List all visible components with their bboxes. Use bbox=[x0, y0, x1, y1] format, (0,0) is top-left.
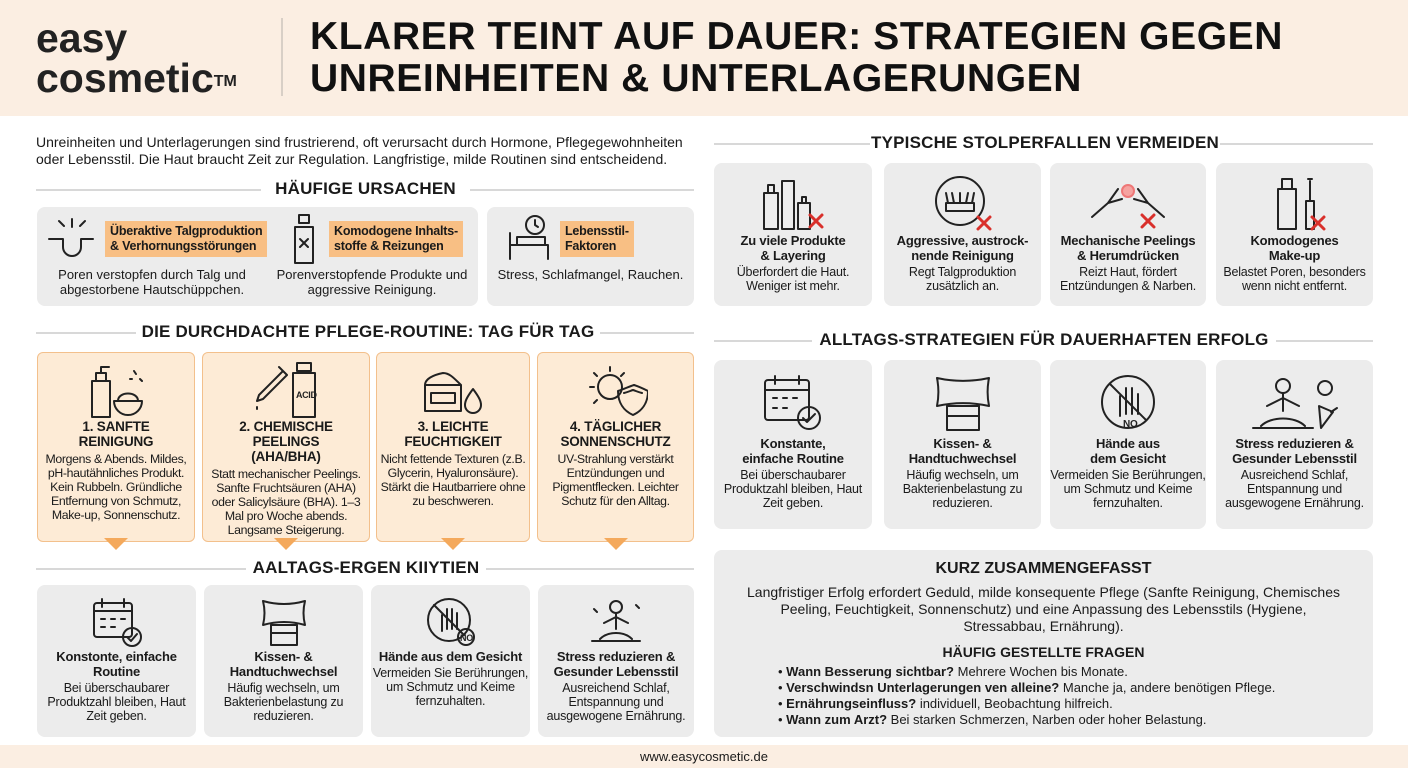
footer bbox=[0, 745, 1408, 768]
card: hands: Vermeiden Sie Berührungen, um Schmutz und Keime fernzuhalten. bbox=[373, 666, 528, 708]
card: aggressive cleansing: Aggressive, austrock- bbox=[897, 233, 1028, 248]
footer: www.easycosmetic.de bbox=[640, 749, 768, 764]
logo bbox=[36, 15, 237, 101]
card: stress: Ausreichend Schlaf, Entspannung und ausgewogene Ernährung. bbox=[547, 681, 685, 723]
card: aggressive cleansing bbox=[884, 163, 1041, 306]
card: picking: & Herumdrücken bbox=[1077, 248, 1179, 263]
heading: daily: AALTAGS-ERGEN KIIYTIEN bbox=[253, 558, 479, 577]
card: hands right bbox=[1050, 360, 1206, 529]
card: cleansing: 1. SANFTE bbox=[82, 419, 150, 434]
title bbox=[310, 15, 1283, 100]
tag: comedogenic: stoffe & Reizungen bbox=[334, 239, 444, 253]
tag: comedogenic bbox=[329, 221, 463, 257]
intro text: Unreinheiten und Unterlagerungen sind frustrierend, oft verursacht durch Hormone, Pflegegewohnheiten oder Lebensstil. Die Haut braucht Zeit zur Regulation. Langfristige, milde Routinen sind entscheidend. bbox=[36, 134, 683, 167]
card: moisture: FEUCHTIGKEIT bbox=[404, 434, 502, 449]
faq list: • Wann zum Arzt? Bei starken Schmerzen, Narben oder hoher Belastung. bbox=[778, 712, 1206, 727]
card: pillow: Kissen- & bbox=[254, 649, 313, 664]
faq list: • Ernährungseinfluss? individuell, Beobachtung hilfreich. bbox=[778, 696, 1113, 711]
card: routine right: Konstante, bbox=[760, 436, 826, 451]
card: sunscreen: 4. TÄGLICHER bbox=[570, 419, 661, 434]
panel: causes: Porenverstopfende Produkte und aggressive Reinigung. bbox=[277, 267, 467, 297]
logo: cosmeticTM bbox=[36, 55, 237, 101]
panel: lifestyle: Lebensstil- bbox=[565, 224, 629, 238]
card: peeling bbox=[202, 352, 370, 542]
tag: sebum: & Verhornungsstörungen bbox=[110, 239, 256, 253]
title: KLARER TEINT AUF DAUER: STRATEGIEN GEGEN bbox=[310, 15, 1283, 58]
card: pillow: Häufig wechseln, um Bakterienbelastung zu reduzieren. bbox=[224, 681, 343, 723]
heading: pitfalls: TYPISCHE STOLPERFALLEN VERMEIDEN bbox=[871, 133, 1219, 152]
faq list bbox=[778, 664, 1275, 727]
card: sunscreen bbox=[537, 352, 694, 542]
card: peeling: 2. CHEMISCHE PEELINGS bbox=[239, 419, 333, 449]
panel: causes: Poren verstopfen durch Talg und abgestorbene Hautschüppchen. bbox=[58, 267, 246, 297]
card: hands right: dem Gesicht bbox=[1090, 451, 1166, 466]
title: UNREINHEITEN & UNTERLAGERUNGEN bbox=[310, 57, 1082, 100]
icon: bottle bbox=[294, 214, 314, 264]
card: too many products: Zu viele Produkte bbox=[741, 233, 845, 248]
panel: lifestyle: Stress, Schlafmangel, Rauchen. bbox=[498, 267, 683, 282]
card: hands bbox=[371, 585, 530, 737]
card: routine right: Bei überschaubarer Produktzahl bleiben, Haut Zeit geben. bbox=[724, 468, 862, 510]
icon: pore bbox=[48, 218, 94, 257]
card: makeup: Komodogenes bbox=[1250, 233, 1339, 248]
card: stress right: Ausreichend Schlaf, Entspannung und ausgewogene Ernährung. bbox=[1225, 468, 1364, 510]
card: stress right bbox=[1216, 360, 1373, 529]
card: routine bottom bbox=[37, 585, 196, 737]
card: pillow right bbox=[884, 360, 1041, 529]
icon: bed clock bbox=[509, 215, 549, 260]
card: sunscreen: SONNENSCHUTZ bbox=[560, 434, 671, 449]
card: hands: Hände aus dem Gesicht bbox=[379, 649, 522, 664]
card: stress right: Gesunder Lebensstil bbox=[1232, 451, 1357, 466]
card: stress right: Stress reduzieren & bbox=[1235, 436, 1354, 451]
panel: summary bbox=[714, 550, 1373, 737]
card: routine bottom: Bei überschaubarer Produktzahl bleiben, Haut Zeit geben. bbox=[47, 681, 186, 723]
card: pillow right: Handtuchwechsel bbox=[909, 451, 1016, 466]
card: makeup bbox=[1216, 163, 1373, 306]
card: pillow: Handtuchwechsel bbox=[230, 664, 337, 679]
card: makeup: Make-up bbox=[1269, 248, 1320, 263]
card: picking: Mechanische Peelings bbox=[1061, 233, 1195, 248]
card: too many products: & Layering bbox=[760, 248, 826, 263]
card: routine right: einfache Routine bbox=[742, 451, 844, 466]
card: aggressive cleansing: nende Reinigung bbox=[911, 248, 1014, 263]
tag: comedogenic: Komodogene Inhalts- bbox=[334, 224, 458, 238]
card: cleansing bbox=[37, 352, 195, 542]
card: picking: Reizt Haut, fördert Entzündungen & Narben. bbox=[1060, 265, 1196, 293]
card: peeling: ACID bbox=[296, 390, 317, 400]
card: routine bottom: Konstonte, einfache Routine bbox=[56, 649, 177, 679]
tag: sebum: Überaktive Talgproduktion bbox=[110, 224, 262, 238]
header band bbox=[0, 0, 1408, 116]
card: too many products: Überfordert die Haut. Weniger ist mehr. bbox=[737, 265, 849, 293]
tag: sebum bbox=[105, 221, 267, 257]
heading: causes: HÄUFIGE URSACHEN bbox=[275, 179, 456, 198]
card: hands right: NO bbox=[1123, 419, 1138, 430]
panel: summary: KURZ ZUSAMMENGEFASST bbox=[936, 560, 1152, 577]
card: cleansing: REINIGUNG bbox=[79, 434, 153, 449]
heading: routine: DIE DURCHDACHTE PFLEGE-ROUTINE: TAG FÜR TAG bbox=[142, 322, 594, 341]
card: makeup: Belastet Poren, besonders wenn nicht entfernt. bbox=[1223, 265, 1366, 293]
card: too many products bbox=[714, 163, 872, 306]
card: pillow right: Häufig wechseln, um Bakterienbelastung zu reduzieren. bbox=[903, 468, 1022, 510]
heading: strategies: ALLTAGS-STRATEGIEN FÜR DAUERHAFTEN ERFOLG bbox=[819, 330, 1269, 349]
card: moisture: Nicht fettende Texturen (z.B. Glycerin, Hyaluronsäure). Stärkt die Hautbarriere ohne zu beschweren. bbox=[381, 452, 525, 508]
panel: lifestyle: Faktoren bbox=[565, 239, 616, 253]
card: pillow right: Kissen- & bbox=[933, 436, 992, 451]
card: hands: NO bbox=[460, 633, 473, 643]
card: moisture bbox=[376, 352, 530, 542]
card: picking bbox=[1050, 163, 1206, 306]
card: pillow bbox=[204, 585, 363, 737]
card: peeling: (AHA/BHA) bbox=[251, 449, 321, 464]
faq list: • Wann Besserung sichtbar? Mehrere Wochen bis Monate. bbox=[778, 664, 1128, 679]
card: aggressive cleansing: Regt Talgproduktion zusätzlich an. bbox=[909, 265, 1016, 293]
panel: lifestyle bbox=[487, 207, 694, 306]
panel: summary: HÄUFIG GESTELLTE FRAGEN bbox=[943, 644, 1144, 660]
panel: causes bbox=[37, 207, 478, 306]
card: cleansing: Morgens & Abends. Mildes, pH-hautähnliches Produkt. Kein Rubbeln. Gründliche Entfernung von Schmutz, Make-up, Sonnenschutz. bbox=[46, 452, 186, 522]
card: stress: Stress reduzieren & Gesunder Lebensstil bbox=[554, 649, 678, 679]
card: peeling: Statt mechanischer Peelings. Sanfte Fruchtsäuren (AHA) oder Salicylsäure (BHA). 1–3 Mal pro Woche abends. Langsame Steigerung. bbox=[211, 467, 361, 537]
panel: summary: Langfristiger Erfolg erfordert Geduld, milde konsequente Pflege (Sanfte Reinigung, Chemisches Peeling, Feuchtigkeit, Sonnenschutz) und eine Anpassung des Lebensstils (Hygiene, Stressabbau, Ernährung). bbox=[747, 584, 1340, 634]
card: hands right: Hände aus bbox=[1096, 436, 1160, 451]
card: routine right bbox=[714, 360, 872, 529]
faq list: • Verschwindsn Unterlagerungen ven alleine? Manche ja, andere benötigen Pflege. bbox=[778, 680, 1275, 695]
card: sunscreen: UV-Strahlung verstärkt Entzündungen und Pigmentflecken. Leichter Schutz für den Alltag. bbox=[552, 452, 679, 508]
card: stress bbox=[538, 585, 694, 737]
card: moisture: 3. LEICHTE bbox=[418, 419, 488, 434]
card: hands right: Vermeiden Sie Berührungen, um Schmutz und Keime fernzuhalten. bbox=[1050, 468, 1206, 510]
logo: easy bbox=[36, 15, 127, 61]
